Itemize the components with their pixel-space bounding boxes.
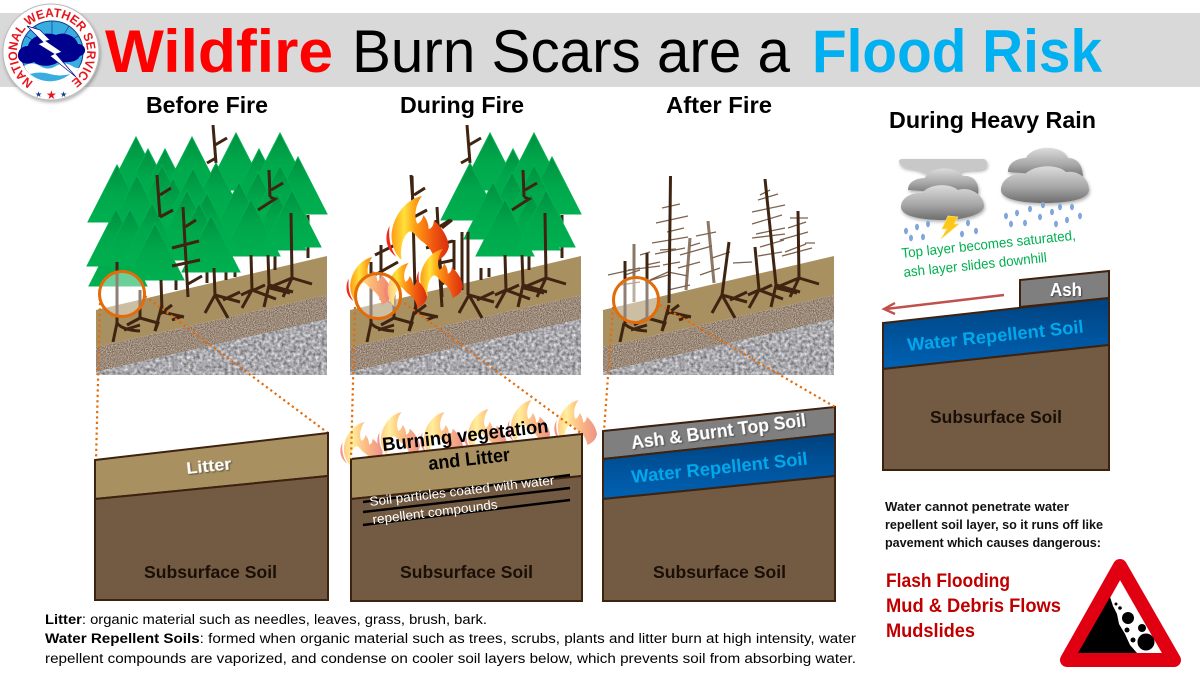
soil section: during fire	[340, 400, 597, 601]
definitions text: Water Repellent Soils : formed when organic material such as trees, scrubs, plants and litter burn at high intensity, water	[45, 631, 857, 646]
zoom lines: after	[604, 305, 835, 431]
icon: thunderstorm cloud	[899, 159, 987, 220]
soil section: heavy rain	[883, 271, 1109, 470]
flames	[346, 196, 463, 308]
subsurface label: Subsurface Soil	[653, 562, 786, 582]
logo ring text: NATIONAL WEATHER SERVICE	[8, 8, 96, 88]
heading: During Fire: During Fire	[400, 92, 524, 118]
hazards list: Mud & Debris Flows	[886, 596, 1061, 617]
icon: rain cloud	[1001, 148, 1089, 203]
definitions text: Litter: organic material such as needles, leaves, grass, brush, bark.	[45, 612, 487, 627]
water repellent label: Water Repellent Soil	[906, 317, 1084, 355]
litter flames	[340, 400, 597, 467]
saturated note line 1: Top layer becomes saturated,	[901, 227, 1076, 261]
title band	[0, 13, 1200, 87]
water repellent lines	[363, 475, 570, 525]
hazards list: Flash Flooding	[886, 571, 1010, 592]
runoff explanation: repellent soil layer, so it runs off like	[885, 518, 1103, 532]
litter label: Litter	[185, 454, 233, 478]
coated particles note: Soil particles coated with water	[369, 472, 556, 509]
subsurface label: Subsurface Soil	[144, 562, 277, 582]
ash label: Ash & Burnt Top Soil	[630, 410, 807, 453]
title: Flood Risk	[812, 18, 1103, 85]
zoom lines: before	[96, 296, 328, 460]
zoom circle	[356, 274, 400, 318]
runoff explanation: Water cannot penetrate water	[885, 500, 1069, 514]
hazards list: Mudslides	[886, 621, 975, 642]
title: Wildfire	[105, 18, 333, 85]
hazards list	[886, 571, 1061, 642]
zoom circle	[100, 272, 144, 316]
forest of green trees	[87, 133, 327, 286]
zoom lines: during	[351, 300, 582, 459]
logo: National Weather Service: ★	[60, 90, 67, 99]
icon: rain drops	[904, 202, 1082, 241]
burnt thin branches	[608, 190, 815, 290]
soil section: after fire	[603, 407, 835, 601]
arrow: ash slides downhill	[884, 295, 1004, 314]
panel: during fire hillside	[346, 125, 581, 375]
title	[105, 18, 1103, 85]
logo: National Weather Service: ★	[46, 88, 57, 102]
runoff explanation: pavement which causes dangerous:	[885, 536, 1101, 550]
title: Burn Scars are a	[352, 18, 791, 85]
heading: Before Fire: Before Fire	[146, 92, 268, 118]
panel: before fire hillside	[87, 125, 327, 375]
icon: falling rocks warning sign	[1067, 566, 1174, 660]
zoom circle	[614, 278, 658, 322]
saturated note line 2: ash layer slides downhill	[903, 249, 1048, 280]
remaining green trees	[441, 133, 581, 256]
definitions text	[45, 612, 857, 666]
ash label: Ash	[1050, 280, 1082, 300]
panel: after fire hillside	[603, 176, 834, 375]
and litter label: and Litter	[427, 445, 512, 475]
water repellent label: Water Repellent Soil	[630, 449, 808, 487]
burnt pale trunks	[634, 221, 714, 302]
definitions text: repellent compounds are vaporized, and condense on cooler soil layers below, which prevents soil from absorbing water.	[45, 651, 856, 666]
heading: During Heavy Rain: During Heavy Rain	[889, 107, 1096, 133]
icon: lightning bolt	[941, 216, 959, 239]
repellent compounds note: repellent compounds	[372, 497, 499, 527]
heading: After Fire: After Fire	[666, 92, 772, 118]
soil section: before fire	[95, 433, 328, 600]
runoff explanation	[885, 500, 1103, 550]
logo: National Weather Service: ★	[35, 90, 42, 99]
burnt trunks	[625, 176, 799, 323]
subsurface label: Subsurface Soil	[400, 562, 533, 582]
subsurface label: Subsurface Soil	[930, 407, 1062, 427]
logo: National Weather Service	[2, 4, 102, 104]
burning vegetation label: Burning vegetation	[381, 416, 549, 456]
